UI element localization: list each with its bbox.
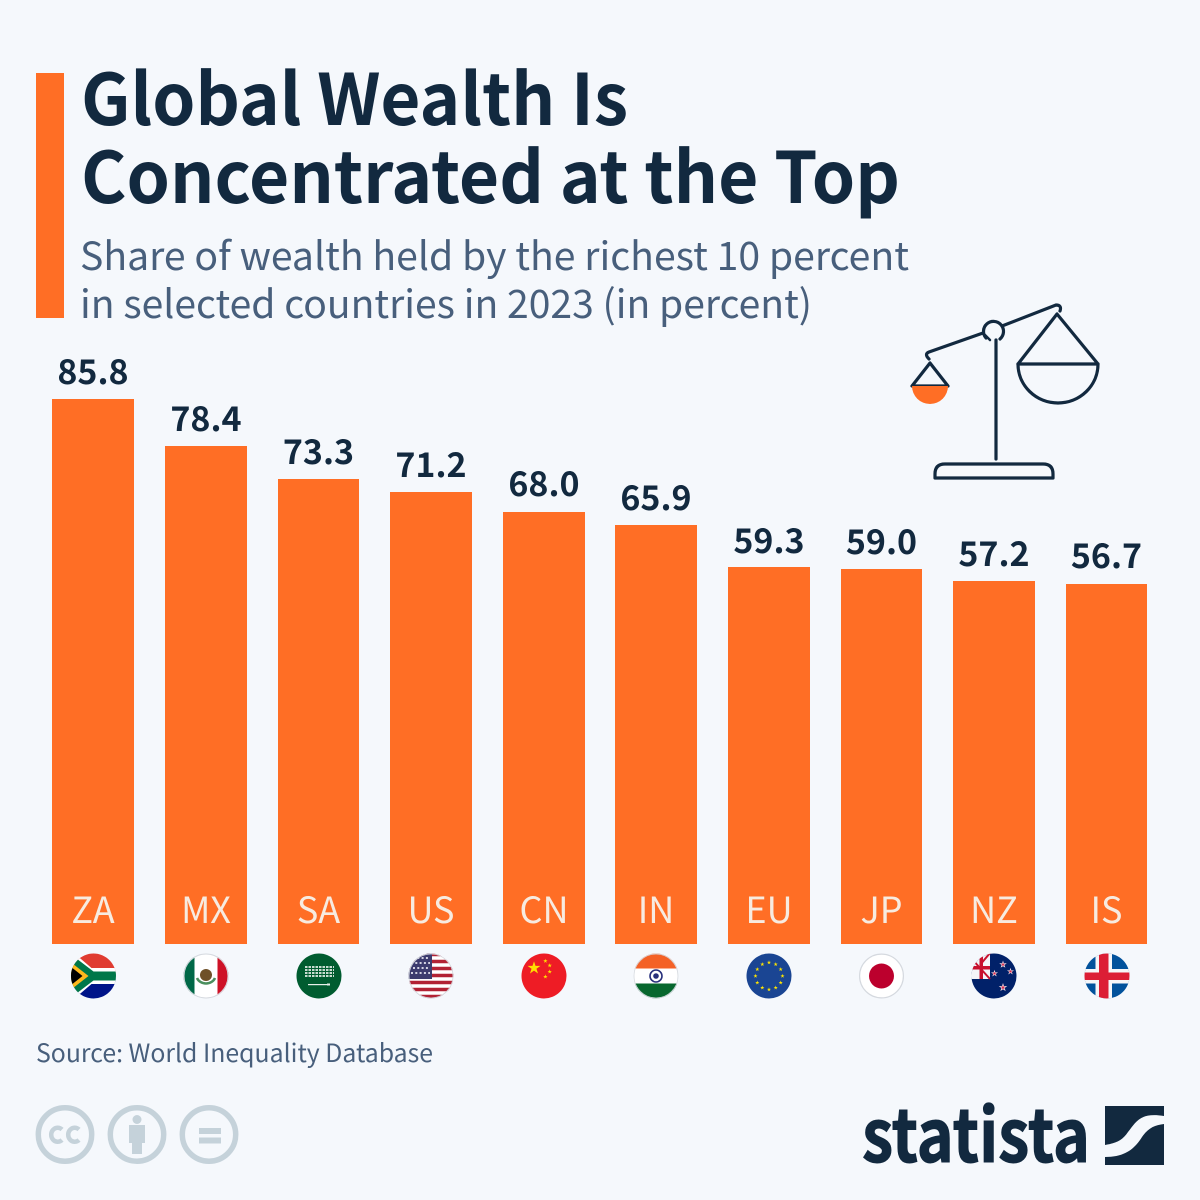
bar: South Africa: ZA <box>71 882 115 934</box>
bar: Mexico: MX <box>181 882 231 934</box>
bar: Japan: JP <box>860 882 903 934</box>
icon: balance scale <box>912 305 1098 478</box>
bar: Saudi Arabia: SA <box>297 882 340 934</box>
flag: China <box>521 953 567 999</box>
subtitle <box>80 226 909 330</box>
flag: New Zealand <box>971 953 1017 999</box>
bar: New Zealand <box>953 527 1035 944</box>
flag: Saudi Arabia <box>296 953 342 999</box>
bar: China <box>503 457 585 944</box>
bar: China: 68.0 <box>508 457 580 506</box>
icon: creative commons <box>38 1108 92 1161</box>
title: Global Wealth Is <box>81 44 628 146</box>
bar: South Africa <box>52 345 134 944</box>
bar: Saudi Arabia <box>278 425 359 944</box>
bar: New Zealand: 57.2 <box>958 527 1030 576</box>
bar: South Africa: 85.8 <box>57 345 129 394</box>
bar: European Union: 59.3 <box>733 514 805 563</box>
bar: Iceland <box>1066 529 1147 944</box>
bar: Saudi Arabia: 73.3 <box>283 425 354 474</box>
bar: Iceland: 56.7 <box>1071 529 1142 578</box>
bar: India: IN <box>638 882 674 934</box>
bar: European Union: EU <box>745 882 793 934</box>
title accent bar <box>36 73 64 318</box>
flag: Mexico <box>183 953 229 999</box>
bar: Mexico: 78.4 <box>170 392 242 441</box>
bar: Iceland: IS <box>1090 882 1123 934</box>
flag: South Africa <box>71 954 116 998</box>
bar: China: CN <box>520 882 568 934</box>
bar chart <box>52 345 1147 944</box>
flag: Japan <box>860 954 903 998</box>
title <box>81 44 900 224</box>
subtitle: in selected countries in 2023 (in percent) <box>80 274 812 330</box>
bar: United States <box>390 438 472 944</box>
icon: no derivatives <box>182 1108 236 1161</box>
bar: Japan <box>841 515 922 944</box>
bar: United States: US <box>407 882 455 934</box>
icon: attribution <box>110 1108 164 1161</box>
flag: European Union <box>746 953 792 999</box>
bar: Japan: 59.0 <box>846 515 917 564</box>
bar: India: 65.9 <box>620 471 692 520</box>
flag: Iceland <box>1084 953 1130 999</box>
source note: Source: World Inequality Database <box>36 1034 433 1070</box>
bar: India <box>615 471 697 944</box>
bar: Mexico <box>165 392 247 944</box>
flag: United States <box>408 953 454 999</box>
subtitle: Share of wealth held by the richest 10 percent <box>80 226 909 282</box>
bar: European Union <box>728 514 810 944</box>
bar: New Zealand: NZ <box>970 882 1018 934</box>
flag: India <box>633 953 679 1000</box>
title: Concentrated at the Top <box>81 122 900 224</box>
logo: statista: statista <box>862 1078 1090 1184</box>
bar: United States: 71.2 <box>395 438 467 487</box>
